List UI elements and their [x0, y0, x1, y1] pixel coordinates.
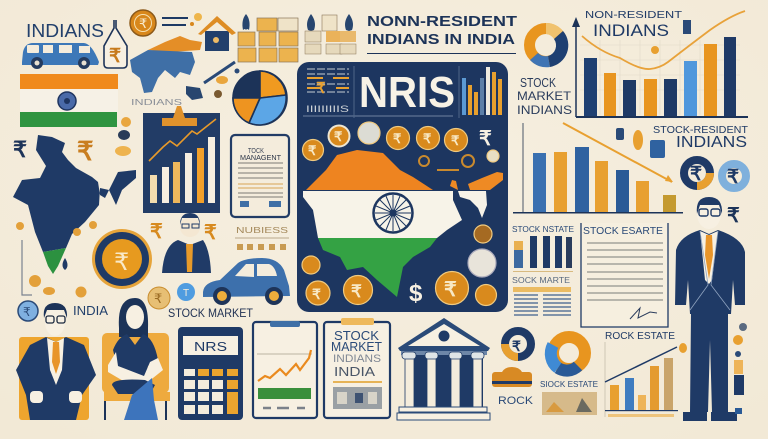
- icon: small lines and coin: [162, 13, 202, 26]
- icon: coin and blue badge: ₹: [154, 291, 162, 306]
- chart title: Stock-Resident Indians: [653, 124, 749, 151]
- document: stock market Indians in India: INDIA: [334, 364, 375, 379]
- icon: wheat and frames: [305, 14, 356, 54]
- rupee and dollar glyphs: ₹: [423, 131, 432, 146]
- chart title: Non-Resident Indians: INDIANS: [593, 21, 669, 40]
- person: small man in suit: [162, 213, 211, 273]
- panel header: dashboard stripes: [303, 66, 459, 118]
- panel: central NRIs: [297, 62, 508, 312]
- calculator: NRS: [194, 339, 227, 354]
- pie with rupee: [505, 331, 531, 357]
- text block: stock estate bars: STOCK NSTATE: [512, 224, 574, 234]
- icons: rupee symbols left: ₹: [77, 136, 94, 166]
- icon: blue rupee badge: ₹: [23, 305, 31, 319]
- icon: blue rupee badge: [18, 301, 38, 321]
- icon: rupee coin top: ₹: [139, 16, 147, 31]
- bar chart: rock estate: ROCK ESTATE: [605, 331, 675, 342]
- bar chart: stock-resident falling: [513, 123, 683, 214]
- pie with rupee: ₹: [512, 338, 521, 354]
- text: Stock Market Indians: INDIANS: [517, 103, 572, 117]
- document: tock management tablet: [231, 135, 289, 217]
- donuts with rupee: [684, 160, 746, 188]
- main heading: INDIANS IN INDIA: [367, 32, 516, 48]
- document: stock estate with signature: [581, 223, 668, 327]
- icon: world map: [130, 36, 203, 100]
- icon: coin and blue badge: T: [183, 288, 189, 299]
- bar chart: non-resident Indians: [572, 11, 748, 118]
- icons: rupee symbols left: ₹: [13, 137, 27, 162]
- north-east map fragment: [450, 172, 503, 218]
- donuts with rupee: ₹: [727, 167, 739, 188]
- donut chart bottom: [551, 337, 585, 371]
- text: Nubiess label: [235, 226, 289, 250]
- rupee and dollar glyphs: ₹: [312, 286, 321, 302]
- icon: rupee beside man: ₹: [727, 205, 740, 227]
- icon: rupee price tag: [104, 20, 127, 68]
- document: tock management tablet: MANAGENT: [240, 155, 282, 162]
- label: Siock Estate with collage: [540, 380, 598, 415]
- icon: rupee price tag: ₹: [109, 46, 121, 67]
- document: stock market Indians in India: STOCK: [334, 328, 379, 343]
- chart title: Stock-Resident Indians: STOCK-RESIDENT: [653, 124, 749, 136]
- coin medal: [92, 229, 152, 289]
- rupee and dollar glyphs: ₹: [334, 129, 343, 144]
- document: stock estate with signature: STOCK ESARTE: [583, 226, 663, 237]
- person: standing man in suit: [675, 197, 745, 421]
- heading: Indians: INDIANS: [26, 21, 104, 41]
- small ornaments: [419, 155, 474, 170]
- text block: stock estate bars: [512, 224, 574, 272]
- label: India: INDIA: [73, 303, 108, 318]
- rupee and dollar glyphs: ₹: [351, 282, 362, 301]
- chart title: Non-Resident Indians: NON-RESIDENT: [585, 9, 683, 21]
- icon: gold picture grid: [238, 14, 298, 62]
- axis with small coins, left: [16, 221, 97, 298]
- document: stock market Indians in India: MARKET: [331, 339, 382, 354]
- text: Stock Market Indians: MARKET: [517, 89, 572, 103]
- calculator: [178, 327, 243, 420]
- document: stock market Indians in India: [324, 318, 390, 418]
- icon: bank building: [397, 318, 490, 420]
- icons: rupees beside small man: ₹: [150, 221, 163, 243]
- chart title: Non-Resident Indians: [585, 9, 683, 40]
- text: Stock Market Indians: STOCK: [520, 75, 556, 90]
- chart title: Stock-Resident Indians: INDIANS: [676, 134, 747, 151]
- India flag map: [303, 150, 462, 297]
- label: Rock: ROCK: [498, 395, 534, 407]
- clipboard bar chart: [141, 106, 220, 213]
- icon: house: [198, 16, 236, 51]
- rupee and dollar glyphs: ₹: [451, 133, 460, 148]
- label: Stock Market: STOCK MARKET: [168, 306, 254, 320]
- document: stock market Indians in India: INDIANS: [333, 353, 381, 365]
- pie chart: [233, 71, 287, 125]
- main heading: [367, 14, 517, 54]
- document: tock management tablet: TOCK: [248, 148, 264, 155]
- icon: blue car: [203, 258, 290, 305]
- main heading: NONN-RESIDENT: [367, 14, 517, 30]
- text block: stock market table: [512, 275, 571, 315]
- label: Siock Estate with collage: SIOCK ESTATE: [540, 380, 598, 389]
- donuts with rupee: ₹: [690, 164, 702, 185]
- person: man in suit seated: [16, 303, 96, 420]
- donut chart top: [530, 23, 568, 67]
- person: seated woman: [102, 298, 170, 420]
- text: Stock Market Indians: [517, 75, 572, 117]
- bar chart: rock estate: [605, 331, 687, 417]
- coin medal: ₹: [114, 249, 129, 276]
- icons: scattered finance: [616, 20, 691, 158]
- text: Nubiess label: NUBIESS: [236, 226, 288, 235]
- coins around the map: [302, 122, 499, 306]
- text: Indians map caption: INDIANS: [131, 97, 182, 107]
- panel title: NRIS: NRIS: [359, 68, 455, 117]
- panel header: dashboard stripes: ₹: [316, 80, 326, 97]
- rupee and dollar glyphs: ₹: [308, 143, 317, 158]
- icons: rupees beside small man: ₹: [204, 222, 217, 244]
- clipboard: line chart: [253, 321, 317, 418]
- rupee and dollar glyphs: ₹: [393, 131, 402, 146]
- map of India left: [13, 135, 136, 274]
- icons: rupees beside small man: [150, 221, 217, 244]
- rupee and dollar glyphs: ₹: [479, 128, 492, 150]
- mini bar chart: [462, 67, 502, 115]
- icon: blue van: [22, 43, 99, 69]
- icons: small items beside man: [733, 323, 747, 414]
- icon: pen: [204, 62, 240, 98]
- icon: rupee coin top: [130, 10, 156, 36]
- rupee and dollar glyphs: $: [409, 280, 423, 307]
- rupee and dollar glyphs: ₹: [444, 279, 457, 301]
- icon: coin and blue badge: [148, 283, 195, 309]
- flag of India: [20, 74, 118, 127]
- rupee and dollar glyphs: [308, 128, 492, 307]
- icon: briefcase: [492, 367, 532, 387]
- text block: stock market table: SOCK MARTE: [512, 275, 570, 285]
- panel header: dashboard stripes: IIIIIIIIIS: [306, 104, 349, 114]
- icons: rupee symbols left: [13, 117, 131, 166]
